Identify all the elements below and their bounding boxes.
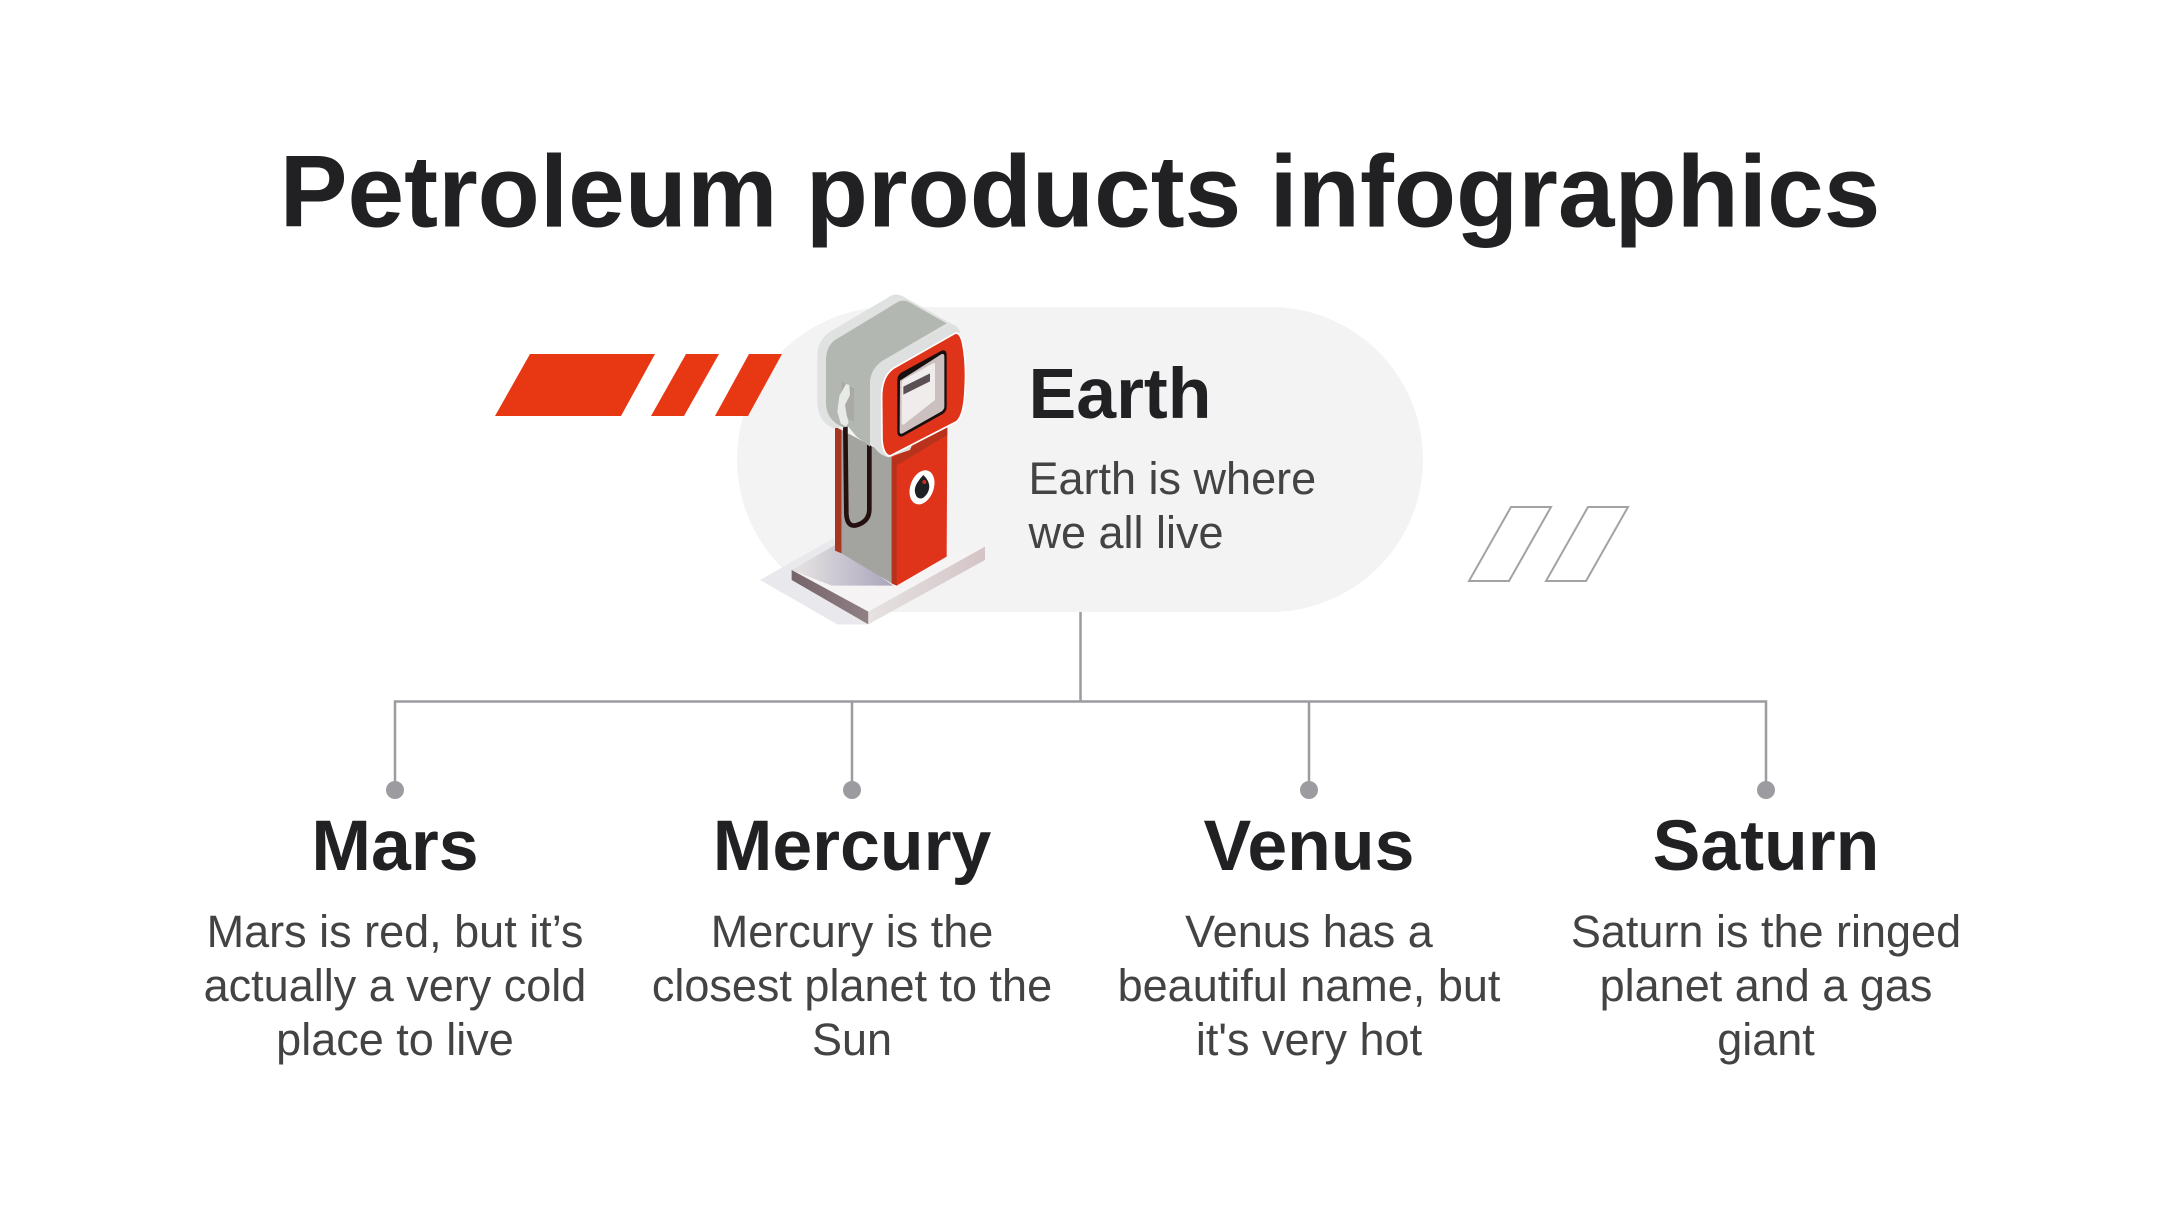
- title: Petroleum products infographics: [280, 134, 1880, 248]
- column: Mars: Mars is red, but it’s: [207, 906, 583, 957]
- column: Mercury: Mercury is the: [711, 906, 993, 957]
- column: Venus: beautiful name, but: [1118, 960, 1501, 1011]
- icon detail: hose: [845, 425, 869, 526]
- column: Saturn: planet and a gas: [1600, 960, 1932, 1011]
- column: Venus: [1118, 806, 1501, 1065]
- column: Mars: Mars: [311, 806, 479, 886]
- column: Saturn: Saturn: [1653, 806, 1879, 886]
- connector tree: [395, 612, 1766, 790]
- column: Saturn: Saturn is the ringed: [1571, 906, 1961, 957]
- column: Mercury: closest planet to the: [652, 960, 1052, 1011]
- column: Saturn: [1571, 806, 1961, 1065]
- column: Mars: [204, 806, 586, 1065]
- column: Venus: Venus has a: [1185, 906, 1434, 957]
- connector dots: [386, 781, 1775, 799]
- icon detail: pump head front frame: [870, 325, 960, 457]
- icon detail: nozzle: [842, 382, 854, 422]
- text: Earth description: we all live: [1028, 507, 1224, 558]
- column: Mercury: Sun: [812, 1014, 892, 1065]
- column: Saturn: giant: [1717, 1014, 1815, 1065]
- decoration: red slanted stripes: [495, 354, 782, 416]
- column: Mercury: [652, 806, 1052, 1065]
- icon detail: pump head side: [817, 294, 957, 447]
- icon: fuel pump: [760, 294, 985, 624]
- column: Venus: it's very hot: [1196, 1014, 1423, 1065]
- decoration: outlined parallelograms: [1469, 507, 1628, 581]
- heading: Earth: Earth: [1028, 354, 1212, 434]
- column: Mercury: Mercury: [713, 806, 991, 886]
- panel: Earth pill background: [737, 307, 1423, 612]
- column: Venus: Venus: [1204, 806, 1414, 886]
- column: Mars: place to live: [276, 1014, 514, 1065]
- icon detail: oil drop badge: [905, 467, 939, 508]
- icon detail: display: [897, 350, 947, 437]
- text: Earth description: Earth is where: [1028, 453, 1316, 504]
- column: Mars: actually a very cold: [204, 960, 586, 1011]
